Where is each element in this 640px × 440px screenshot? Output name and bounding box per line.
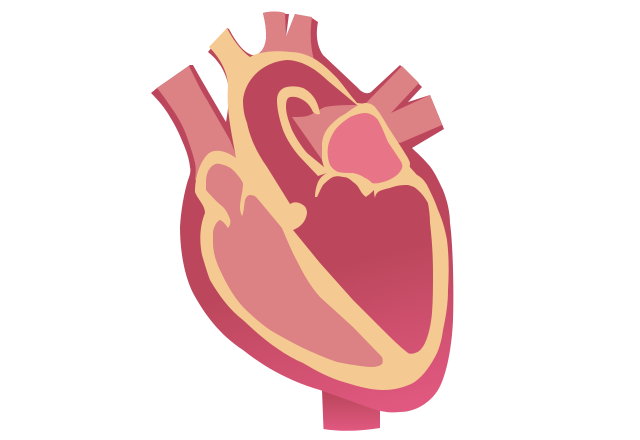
left atrium pink chamber (328, 113, 402, 183)
valve ring (315, 103, 430, 210)
valve curl (277, 86, 330, 176)
left atrium (292, 105, 360, 173)
right atrium and ventricle chamber (206, 164, 383, 367)
heart outer wall (151, 12, 453, 412)
pulmonary vein upper (355, 66, 419, 125)
left ventricle and aorta chamber (243, 60, 433, 354)
septum and inner wall (195, 28, 449, 390)
superior vena cava (157, 66, 240, 180)
inferior vena cava (322, 390, 380, 431)
aorta branches (250, 12, 314, 62)
pulmonary vein lower (380, 95, 442, 143)
